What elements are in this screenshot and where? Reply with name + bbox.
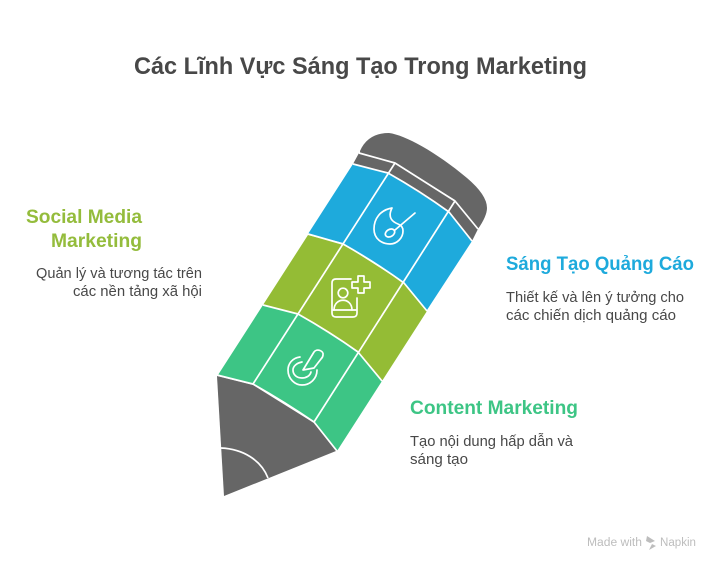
description: Social Media Marketing: Quản lý và tương tác trên bbox=[36, 266, 202, 282]
description: Content Marketing: sáng tạo bbox=[410, 452, 468, 468]
title: Các Lĩnh Vực Sáng Tạo Trong Marketing bbox=[134, 53, 587, 80]
pencil metal band bbox=[353, 153, 478, 241]
footer: Made with Napkin: Napkin bbox=[660, 537, 696, 549]
heading: Social Media Marketing: Social Media bbox=[26, 207, 142, 228]
pencil tip bbox=[217, 376, 336, 496]
description: Sáng Tạo Quảng Cáo bbox=[506, 290, 684, 324]
label: Social Media Marketing bbox=[26, 207, 202, 300]
description: Sáng Tạo Quảng Cáo: các chiến dịch quảng cáo bbox=[506, 308, 676, 324]
icon: pen with target bbox=[288, 350, 323, 385]
blue pencil section bbox=[308, 164, 472, 310]
description: Social Media Marketing: các nền tảng xã hội bbox=[73, 284, 202, 300]
green pencil section bbox=[263, 235, 427, 381]
footer: Made with Napkin bbox=[587, 536, 696, 550]
heading: Social Media Marketing bbox=[26, 207, 142, 252]
section dividers bbox=[217, 153, 478, 478]
heading: Content Marketing: Content Marketing bbox=[410, 398, 578, 419]
icon: paint palette and brush bbox=[374, 208, 415, 244]
heading: Social Media Marketing: Marketing bbox=[51, 231, 142, 252]
teal pencil section bbox=[218, 305, 382, 451]
heading: Sáng Tạo Quảng Cáo: Sáng Tạo Quảng Cáo bbox=[506, 254, 694, 275]
description: Content Marketing: Tạo nội dung hấp dẫn và bbox=[410, 433, 574, 450]
footer: Made with Napkin: Made with bbox=[587, 537, 642, 549]
pencil illustration bbox=[217, 133, 487, 496]
icon: user profile with plus bbox=[332, 276, 370, 317]
description: Content Marketing bbox=[410, 433, 574, 468]
label: Content Marketing bbox=[410, 398, 578, 468]
label: Sáng Tạo Quảng Cáo bbox=[506, 254, 694, 324]
description: Sáng Tạo Quảng Cáo: Thiết kế và lên ý tưởng cho bbox=[506, 290, 684, 306]
description: Social Media Marketing bbox=[36, 266, 202, 300]
icon: Napkin logo bbox=[646, 536, 656, 550]
pencil eraser cap bbox=[360, 133, 487, 229]
